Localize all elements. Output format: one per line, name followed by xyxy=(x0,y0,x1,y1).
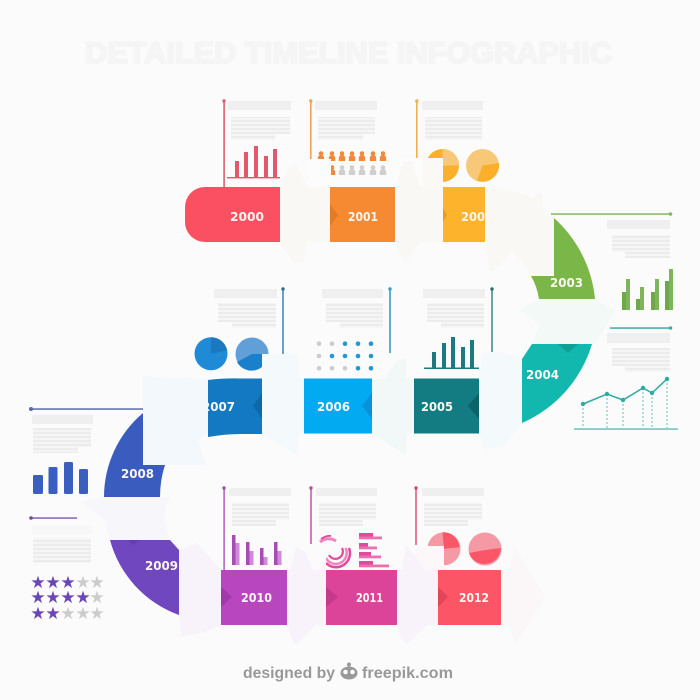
arc band 2004 xyxy=(522,344,592,423)
year band 2001: 2001 xyxy=(348,210,378,224)
arc band 2008: 2008 xyxy=(121,467,154,481)
year band 2005 xyxy=(414,378,479,434)
horizontal bars 2011 xyxy=(359,533,389,567)
star rating 2009: ★ xyxy=(89,588,105,608)
year band 2006 xyxy=(304,378,372,434)
panel: 2002 xyxy=(415,99,499,242)
star rating 2009: ★ xyxy=(30,604,46,624)
text block 2011 xyxy=(316,488,377,526)
marker line 2004 xyxy=(610,326,672,330)
marker line 2003 xyxy=(551,212,672,216)
panel: 2003 xyxy=(531,212,673,310)
marker line 2006 xyxy=(388,287,392,353)
year band 2006: 2006 xyxy=(317,400,350,414)
text block 2012 xyxy=(422,488,484,526)
marker line 2011 xyxy=(309,486,313,544)
pie charts 2007 xyxy=(194,337,268,371)
bar chart 2000 xyxy=(227,146,280,178)
footer: freepik credit: freepik.com xyxy=(362,665,453,682)
year band 2005: 2005 xyxy=(421,400,453,414)
marker line 2000 xyxy=(222,99,226,188)
panel: 2005 xyxy=(414,287,494,434)
line chart 2004 xyxy=(574,377,678,430)
panel: 2007 xyxy=(194,287,285,437)
pie charts 2002 xyxy=(426,149,499,182)
arc band 2003: 2003 xyxy=(550,276,583,290)
footer: freepik credit: designed by xyxy=(243,665,335,682)
text block 2010 xyxy=(229,488,291,526)
star rating 2009: ★ xyxy=(45,588,61,608)
year band 2007 xyxy=(202,378,262,437)
text block 2006 xyxy=(322,289,383,328)
panel: 2009 xyxy=(29,516,179,624)
year band 2010: 2010 xyxy=(241,591,272,605)
arrow connectors: top row xyxy=(280,158,554,276)
star rating 2009: ★ xyxy=(75,588,91,608)
marker line 2010 xyxy=(222,486,226,570)
arrow connectors: middle row xyxy=(143,299,615,465)
marker line 2007 xyxy=(281,287,285,354)
marker line 2012 xyxy=(414,486,418,545)
star rating 2009: ★ xyxy=(30,588,46,608)
star rating 2009: ★ xyxy=(89,604,105,624)
text block 2000 xyxy=(228,101,291,140)
marker line 2001 xyxy=(309,99,312,163)
text block 2004 xyxy=(607,333,670,372)
panel: 2012 xyxy=(414,486,502,625)
year band 2002 xyxy=(443,187,493,242)
arc band 2003 xyxy=(531,218,595,299)
title: DETAILED TIMELINE INFOGRAPHIC xyxy=(85,37,612,70)
icon: freepik mascot xyxy=(340,662,358,680)
panel: 2011 xyxy=(309,486,397,625)
panel: 2001 xyxy=(309,99,395,242)
text block 2005 xyxy=(423,289,485,328)
star rating 2009: ★ xyxy=(60,604,76,624)
year band 2007: 2007 xyxy=(202,400,235,414)
year band 2000: 2000 xyxy=(230,210,264,224)
bar chart 2010 xyxy=(232,535,282,565)
year band 2000 xyxy=(185,187,280,242)
radial chart 2011 xyxy=(320,536,350,567)
arc band 2009: 2009 xyxy=(145,559,178,573)
people chart 2001 xyxy=(318,151,386,175)
star rating 2009: ★ xyxy=(45,604,61,624)
year band 2002: 2002 xyxy=(461,210,493,224)
star rating 2009 xyxy=(30,573,105,624)
panel: 2010 xyxy=(221,486,291,625)
star rating 2009: ★ xyxy=(75,604,91,624)
arc band 2004: 2004 xyxy=(526,368,559,382)
text block 2008 xyxy=(32,415,93,453)
marker line 2008 xyxy=(29,407,145,411)
year band 2001 xyxy=(330,187,395,242)
marker line 2005 xyxy=(490,287,494,352)
year band 2011: 2011 xyxy=(356,591,383,605)
star rating 2009: ★ xyxy=(89,573,105,593)
star rating 2009: ★ xyxy=(45,573,61,593)
panel: 2000 xyxy=(185,99,291,242)
text block 2001 xyxy=(315,101,377,140)
marker line 2009 xyxy=(29,516,77,520)
star rating 2009: ★ xyxy=(75,573,91,593)
text block 2002 xyxy=(422,101,483,140)
panel: 2006 xyxy=(304,287,392,434)
panel: 2004 xyxy=(522,326,678,430)
footer: freepik credit xyxy=(243,662,453,682)
panel: 2008 xyxy=(29,407,165,497)
text block 2007 xyxy=(214,289,277,328)
text block 2003 xyxy=(607,220,670,258)
pie charts 2012 xyxy=(428,532,502,566)
marker line 2002 xyxy=(415,99,418,161)
text block 2009 xyxy=(32,525,92,563)
bar chart 2005 xyxy=(424,337,479,369)
bar chart 2003 xyxy=(622,269,673,310)
dot matrix 2006 xyxy=(317,341,373,371)
arc band 2009 xyxy=(110,540,179,615)
arrow connectors: bottom row xyxy=(82,497,545,645)
star rating 2009: ★ xyxy=(30,573,46,593)
star rating 2009: ★ xyxy=(60,588,76,608)
bar chart 2008 xyxy=(33,462,88,494)
star rating 2009: ★ xyxy=(60,573,76,593)
year band 2012: 2012 xyxy=(459,591,489,605)
